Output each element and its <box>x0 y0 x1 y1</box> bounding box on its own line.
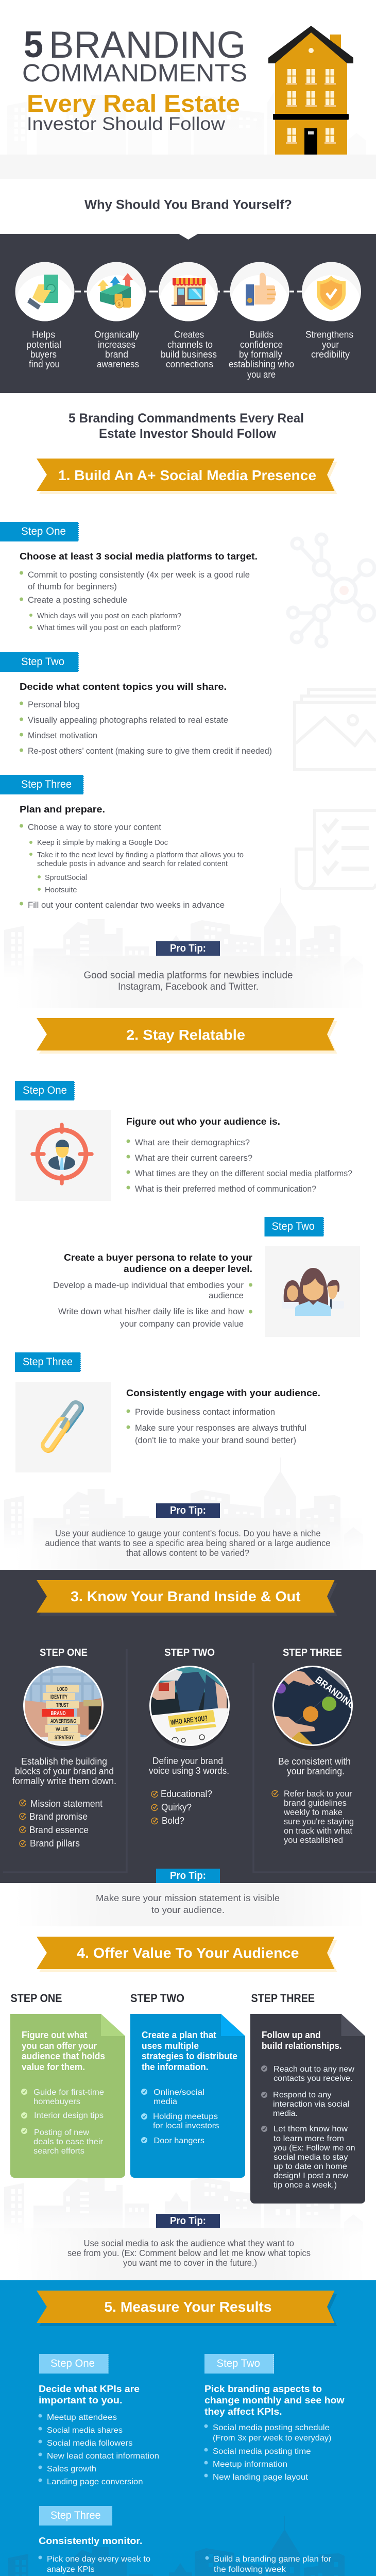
text block: monitor: Build a branding game plan for <box>214 2555 332 2564</box>
connector dashes <box>75 291 302 293</box>
checklist: Educational? <box>161 1789 212 1799</box>
panel: pro tip 3 text <box>0 1883 376 1926</box>
description: blocks of your brand and <box>15 1766 114 1776</box>
tab: section 2 step two <box>265 1217 324 1236</box>
column: step two <box>149 1647 230 1826</box>
step headings: section 4: STEP TWO <box>130 1992 184 2005</box>
tab: step one: Step One <box>21 526 66 537</box>
card: step one: Interior design tips <box>34 2111 104 2120</box>
panel: pro tip 3 text: Make sure your mission statement is visible <box>96 1893 280 1903</box>
text block: branding aspects: Social media posting time <box>213 2447 311 2456</box>
text block: branding aspects: Pick branding aspects to <box>204 2384 322 2394</box>
card: step one: audience that holds <box>22 2051 105 2061</box>
text block: consistently engage: (don't lie to make your brand sound better) <box>135 1436 296 1445</box>
card: step two: the information. <box>142 2062 208 2072</box>
text block: KPIs: Meetup attendees <box>47 2413 117 2422</box>
decorative icon: network <box>288 534 374 647</box>
card: step three: you (Ex: Follow me on <box>274 2144 355 2153</box>
text block: KPIs: Social media shares <box>47 2426 123 2435</box>
text block: monitor: the following week <box>214 2565 286 2574</box>
label: Strengthens <box>305 330 353 340</box>
column: step two: STEP TWO <box>164 1647 215 1658</box>
column: step three <box>272 1647 357 1845</box>
title: 5 <box>24 24 43 65</box>
step headings: section 4: STEP THREE <box>251 1992 315 2005</box>
card: step three: Let them know how <box>274 2125 348 2133</box>
title: Every Real Estate <box>27 90 240 117</box>
card: step three: contacts you receive. <box>274 2074 352 2083</box>
text block: figure out audience: What are their current careers? <box>135 1154 252 1163</box>
text block: figure out audience: What are their demographics? <box>135 1138 250 1147</box>
text block: step three: Plan and prepare. <box>20 804 105 815</box>
benefit 5: credibility <box>302 262 361 360</box>
panel: section 3 <box>0 1570 376 1883</box>
card: step three: interaction via social <box>273 2100 349 2109</box>
checklist <box>272 1789 354 1845</box>
label <box>305 330 353 360</box>
text block: figure out audience <box>126 1116 352 1194</box>
checklist: Refer back to your <box>284 1789 352 1799</box>
text block: monitor: analyze KPIs <box>47 2565 95 2574</box>
label <box>94 330 139 369</box>
icon: shield <box>317 276 346 310</box>
checklist: Bold? <box>162 1816 184 1826</box>
image box: chain link <box>15 1382 111 1472</box>
label: find you <box>29 359 60 369</box>
photo: brand blocks: TRUST <box>56 1702 69 1708</box>
text block: monitor: Consistently monitor. <box>39 2536 142 2546</box>
label <box>229 330 294 380</box>
card: step three: Respond to any <box>273 2091 332 2099</box>
icon: storefront <box>172 278 207 306</box>
tab: step one <box>39 2354 108 2374</box>
label: channels to <box>167 340 213 350</box>
text block: consistently engage: Provide business contact information <box>135 1408 275 1417</box>
text block: step one: of thumb for beginners) <box>28 582 117 591</box>
heading: 5 branding commandments: 5 Branding Commandments Every Real <box>69 411 304 426</box>
checklist: weekly to make <box>283 1808 343 1817</box>
card: step two: for local investors <box>153 2122 219 2130</box>
description: Define your brand <box>152 1756 223 1766</box>
text block: KPIs: New lead contact information <box>47 2452 159 2461</box>
photo: brand blocks: ADVERTISING <box>50 1718 76 1724</box>
pro tip label: Pro Tip: <box>170 2215 206 2227</box>
pro tip label <box>156 2214 220 2228</box>
panel: pro tip 3 text: to your audience. <box>151 1905 225 1915</box>
text block: figure out audience: What times are they on the different social media platforms? <box>135 1169 352 1178</box>
checklist: Brand essence <box>29 1825 89 1835</box>
column frames <box>3 1649 376 1872</box>
text block: branding aspects: Meetup information <box>213 2460 287 2469</box>
label: you are <box>247 369 276 380</box>
text block: step two: Mindset motivation <box>28 731 97 740</box>
banner: 1 <box>37 459 337 494</box>
description <box>12 1756 116 1786</box>
label: Helps <box>32 330 55 340</box>
label: build business <box>161 349 217 360</box>
panel: section 5 <box>0 2280 376 2576</box>
card: step three: Reach out to any new <box>274 2065 354 2074</box>
banner: 5: 5. Measure Your Results <box>104 2299 272 2315</box>
column: step one: STEP ONE <box>40 1647 88 1658</box>
card: step one: homebuyers <box>33 2097 80 2106</box>
tab: step two: Step Two <box>216 2358 260 2369</box>
tab: section 2 step three: Step Three <box>23 1356 73 1368</box>
panel: benefits <box>0 234 376 393</box>
banner: 4: 4. Offer Value To Your Audience <box>77 1945 299 1961</box>
card: step two: strategies to distribute <box>142 2051 237 2061</box>
icon: thumbs up <box>246 273 276 306</box>
benefit 1: helps buyers <box>15 262 74 369</box>
text block: step two <box>20 682 272 756</box>
panel: pro tip 2 <box>0 1458 376 1570</box>
photo: brand blocks: VALUE <box>56 1726 68 1733</box>
tip text: see from you. (Ex: Comment below and let me know what topics <box>67 2248 311 2258</box>
panel: pro tip 4 <box>0 2214 376 2280</box>
tip text <box>83 970 293 992</box>
photo: brand blocks <box>23 1666 104 1750</box>
card: step three: up to date on home <box>274 2162 347 2171</box>
label: Creates <box>174 330 204 340</box>
header panel <box>0 24 376 179</box>
text block: consistently engage: Consistently engage with your audience. <box>126 1388 320 1398</box>
label: credibility <box>311 349 350 360</box>
tab: step three: Step Three <box>21 778 72 790</box>
label: buyers <box>30 349 57 360</box>
tab: step two <box>204 2354 274 2374</box>
card: step three: tip once a week.) <box>274 2181 337 2190</box>
tab: section 2 step three <box>15 1352 81 1372</box>
text block: consistently engage: Make sure your responses are always truthful <box>135 1423 306 1433</box>
text block: monitor <box>38 2536 332 2574</box>
pro tip 3 label <box>156 1869 220 1883</box>
step headings: section 4 <box>10 1992 315 2005</box>
card: step three: media. <box>273 2109 298 2118</box>
text block: step three: schedule posts in advance and search for related content <box>37 860 228 868</box>
text block: branding aspects: Social media posting schedule <box>213 2424 330 2432</box>
card: step one: Guide for first-time <box>33 2088 104 2097</box>
tab: step one: Step One <box>50 2358 95 2369</box>
card: step three: social media to stay <box>274 2153 348 2162</box>
text block: step three: Fill out your content calendar two weeks in advance <box>28 901 225 910</box>
label: brand <box>105 349 128 360</box>
photo: who are you: WHO ARE YOU? <box>170 1714 208 1726</box>
checklist: brand guidelines <box>284 1799 347 1808</box>
text block: KPIs: Decide what KPIs are <box>39 2384 140 2394</box>
tip text: Use your audience to gauge your content's focus. Do you have a niche <box>55 1528 320 1538</box>
description: Be consistent with <box>278 1756 351 1767</box>
tip text: Instagram, Facebook and Twitter. <box>118 981 259 992</box>
photo: branding booklet: BRANDING <box>313 1674 357 1711</box>
label: potential <box>26 340 61 350</box>
banner: 5 <box>37 2291 337 2326</box>
tab: section 2 step one <box>15 1081 75 1100</box>
text block: step three: Keep it simple by making a Google Doc <box>37 839 168 847</box>
text block: step three: SproutSocial <box>45 874 87 882</box>
label: by formally <box>239 349 282 360</box>
heading: why brand: Why Should You Brand Yourself? <box>84 198 292 212</box>
text block: branding aspects: (From 3x per week to everyday) <box>213 2434 332 2443</box>
card: step two <box>130 2014 245 2178</box>
card: step three: build relationships. <box>262 2041 342 2051</box>
card: step one: Figure out what <box>22 2030 88 2040</box>
heading: 5 branding commandments <box>69 411 304 441</box>
text block: buyer persona: audience <box>209 1291 244 1300</box>
text block: step one: Create a posting schedule <box>28 596 127 605</box>
decorative icon: checklist <box>296 810 376 889</box>
card: step two: uses multiple <box>142 2041 199 2051</box>
tip text: Good social media platforms for newbies include <box>83 970 293 981</box>
icon: money and arrows: $ <box>117 302 121 308</box>
checklist: sure you're staying <box>284 1817 354 1826</box>
text block: KPIs: Landing page conversion <box>47 2478 143 2486</box>
label: Builds <box>249 330 274 340</box>
label: increases <box>98 340 135 350</box>
tab: section 2 step two: Step Two <box>272 1221 315 1232</box>
tip text: Use social media to ask the audience what they want to <box>83 2238 294 2248</box>
card: step one: deals to ease their <box>33 2138 104 2146</box>
pro tip label <box>156 1503 220 1518</box>
card: step one: value for them. <box>22 2062 85 2072</box>
label: connections <box>166 359 213 369</box>
card: step three: Follow up and <box>262 2030 320 2040</box>
icon: house <box>268 26 353 155</box>
tip text <box>67 2238 311 2268</box>
skyline behind section 4 tip <box>4 2145 363 2236</box>
title <box>22 24 247 134</box>
text block: step three: Hootsuite <box>45 886 77 894</box>
icon: money and arrows <box>98 273 133 308</box>
text block: buyer persona: Develop a made-up individual that embodies your <box>53 1281 244 1290</box>
banner: 2 <box>37 1018 337 1054</box>
text block: step one: Choose at least 3 social media platforms to target. <box>20 551 258 562</box>
icon: hand with money <box>27 275 58 310</box>
image box: buyer personas <box>265 1246 360 1337</box>
tab: step two: Step Two <box>21 656 64 668</box>
text block: step three: Choose a way to store your content <box>28 823 161 832</box>
card: step one: Posting of new <box>34 2128 89 2137</box>
photo: brand blocks: STRATEGY <box>55 1735 74 1741</box>
benefit 3: business connections <box>159 262 218 369</box>
text block: figure out audience: Figure out who your audience is. <box>126 1116 280 1127</box>
text block: step three <box>20 804 244 910</box>
label <box>161 330 217 369</box>
tab: step one <box>0 522 79 541</box>
title: BRANDING <box>49 24 246 66</box>
checklist: Brand pillars <box>30 1838 80 1849</box>
card: step two: media <box>153 2097 177 2106</box>
text block: step three: Take it to the next level by finding a platform that allows you to <box>37 851 244 859</box>
label: your <box>322 340 339 350</box>
checklist: on track with what <box>284 1826 352 1836</box>
banner: 3: 3. Know Your Brand Inside & Out <box>71 1588 301 1604</box>
pro tip label <box>156 941 220 956</box>
text block: step one: Which days will you post on each platform? <box>37 612 181 620</box>
tip text <box>45 1528 331 1558</box>
pro tip label: Pro Tip: <box>170 1505 206 1516</box>
image box: target person <box>15 1110 111 1201</box>
decorative icon: image frames <box>295 689 376 770</box>
text block: branding aspects <box>204 2384 345 2482</box>
tip text: you want me to cover in the future.) <box>123 2258 257 2268</box>
checklist: Brand promise <box>29 1811 88 1822</box>
photo: brand blocks: LOGO <box>57 1686 67 1692</box>
panel: pro tip 1 <box>0 888 376 1008</box>
label: establishing who <box>229 359 294 369</box>
card: step three: design! I post a new <box>274 2172 348 2180</box>
text block: branding aspects: they affect KPIs. <box>204 2406 282 2417</box>
banner: 3 <box>37 1580 337 1616</box>
checklist: Mission statement <box>30 1799 102 1809</box>
column: step three: STEP THREE <box>283 1647 342 1658</box>
banner: 1: 1. Build An A+ Social Media Presence <box>58 467 316 483</box>
text block: buyer persona: Create a buyer persona to relate to your <box>64 1252 252 1263</box>
text block: branding aspects: change monthly and see how <box>204 2395 345 2405</box>
checklist: you established <box>284 1836 343 1845</box>
skyline backdrop <box>7 63 366 155</box>
text block: monitor: Pick one day every week to <box>47 2555 150 2564</box>
description: formally write them down. <box>12 1776 116 1786</box>
text block: KPIs: Sales growth <box>47 2465 96 2473</box>
checklist <box>151 1789 212 1826</box>
text block: buyer persona <box>53 1252 252 1329</box>
checklist <box>20 1799 102 1849</box>
photo: who are you <box>149 1666 230 1750</box>
banner: 2: 2. Stay Relatable <box>126 1027 245 1043</box>
text block: KPIs: Social media followers <box>47 2439 133 2448</box>
text block: KPIs: important to you. <box>39 2395 123 2405</box>
card: step one: search efforts <box>33 2147 84 2156</box>
description: Establish the building <box>21 1756 107 1767</box>
label: Organically <box>94 330 139 340</box>
text block: figure out audience: What is their preferred method of communication? <box>135 1184 316 1194</box>
card: step three <box>250 2014 365 2204</box>
text block: branding aspects: New landing page layout <box>213 2473 309 2482</box>
text block: step two: Decide what content topics you will share. <box>20 682 227 692</box>
tab: section 2 step one: Step One <box>23 1084 67 1096</box>
text block: step two: Visually appealing photographs related to real estate <box>28 716 228 725</box>
text block: step two: Personal blog <box>28 700 80 709</box>
pro tip label: Pro Tip: <box>170 943 206 954</box>
photo: brand blocks: BRAND <box>50 1710 66 1717</box>
text block: step one: Commit to posting consistently (4x per week is a good rule <box>28 570 250 580</box>
card: step three: to learn more from <box>274 2134 344 2143</box>
card: step one <box>10 2014 125 2178</box>
description <box>278 1756 351 1776</box>
step headings: section 4: STEP ONE <box>10 1992 62 2005</box>
benefit 2: brand awareness <box>87 262 146 369</box>
label <box>26 330 61 369</box>
card: step one: you can offer your <box>22 2041 97 2051</box>
tab: step three <box>0 775 83 794</box>
text block: step one: What times will you post on each platform? <box>37 624 181 632</box>
description <box>149 1756 229 1776</box>
title: Investor Should Follow <box>27 114 226 134</box>
label: awareness <box>97 359 139 369</box>
card: step two: Online/social <box>153 2088 204 2097</box>
description: your branding. <box>287 1766 345 1776</box>
tip text: that allows content to be varied? <box>126 1548 249 1558</box>
card: step two: Door hangers <box>153 2137 204 2145</box>
checklist: Quirky? <box>161 1802 192 1812</box>
description: voice using 3 words. <box>149 1766 229 1776</box>
photo: branding booklet <box>272 1666 357 1750</box>
tab: step three <box>39 2506 112 2526</box>
gray band under header <box>0 155 376 179</box>
text block: KPIs <box>38 2384 159 2486</box>
tab: step three: Step Three <box>50 2510 101 2521</box>
photo: brand blocks: IDENTITY <box>50 1694 67 1700</box>
card: step two: Holding meetups <box>153 2112 218 2121</box>
benefit 4: builds confidence <box>229 262 294 380</box>
label: confidence <box>240 340 283 350</box>
pro tip 3 label: Pro Tip: <box>170 1870 206 1882</box>
text block: consistently engage <box>126 1388 320 1445</box>
tip text: audience that wants to see a specific area being shared or a large audience <box>45 1538 331 1548</box>
banner: 4 <box>37 1937 337 1972</box>
text block: buyer persona: your company can provide value <box>120 1319 244 1329</box>
text block: step one <box>20 551 258 632</box>
text block: buyer persona: Write down what his/her daily life is like and how <box>58 1307 244 1316</box>
heading: 5 branding commandments: Estate Investor Should Follow <box>99 427 277 441</box>
card: step two: Create a plan that <box>142 2030 216 2040</box>
tab: step two <box>0 652 79 672</box>
skyline <box>8 2516 367 2576</box>
text block: step two: Re-post others’ content (making sure to give them credit if needed) <box>28 747 272 756</box>
text block: buyer persona: audience on a deeper level. <box>124 1264 252 1274</box>
column: step one <box>12 1647 116 1849</box>
title: COMMANDMENTS <box>22 60 247 87</box>
